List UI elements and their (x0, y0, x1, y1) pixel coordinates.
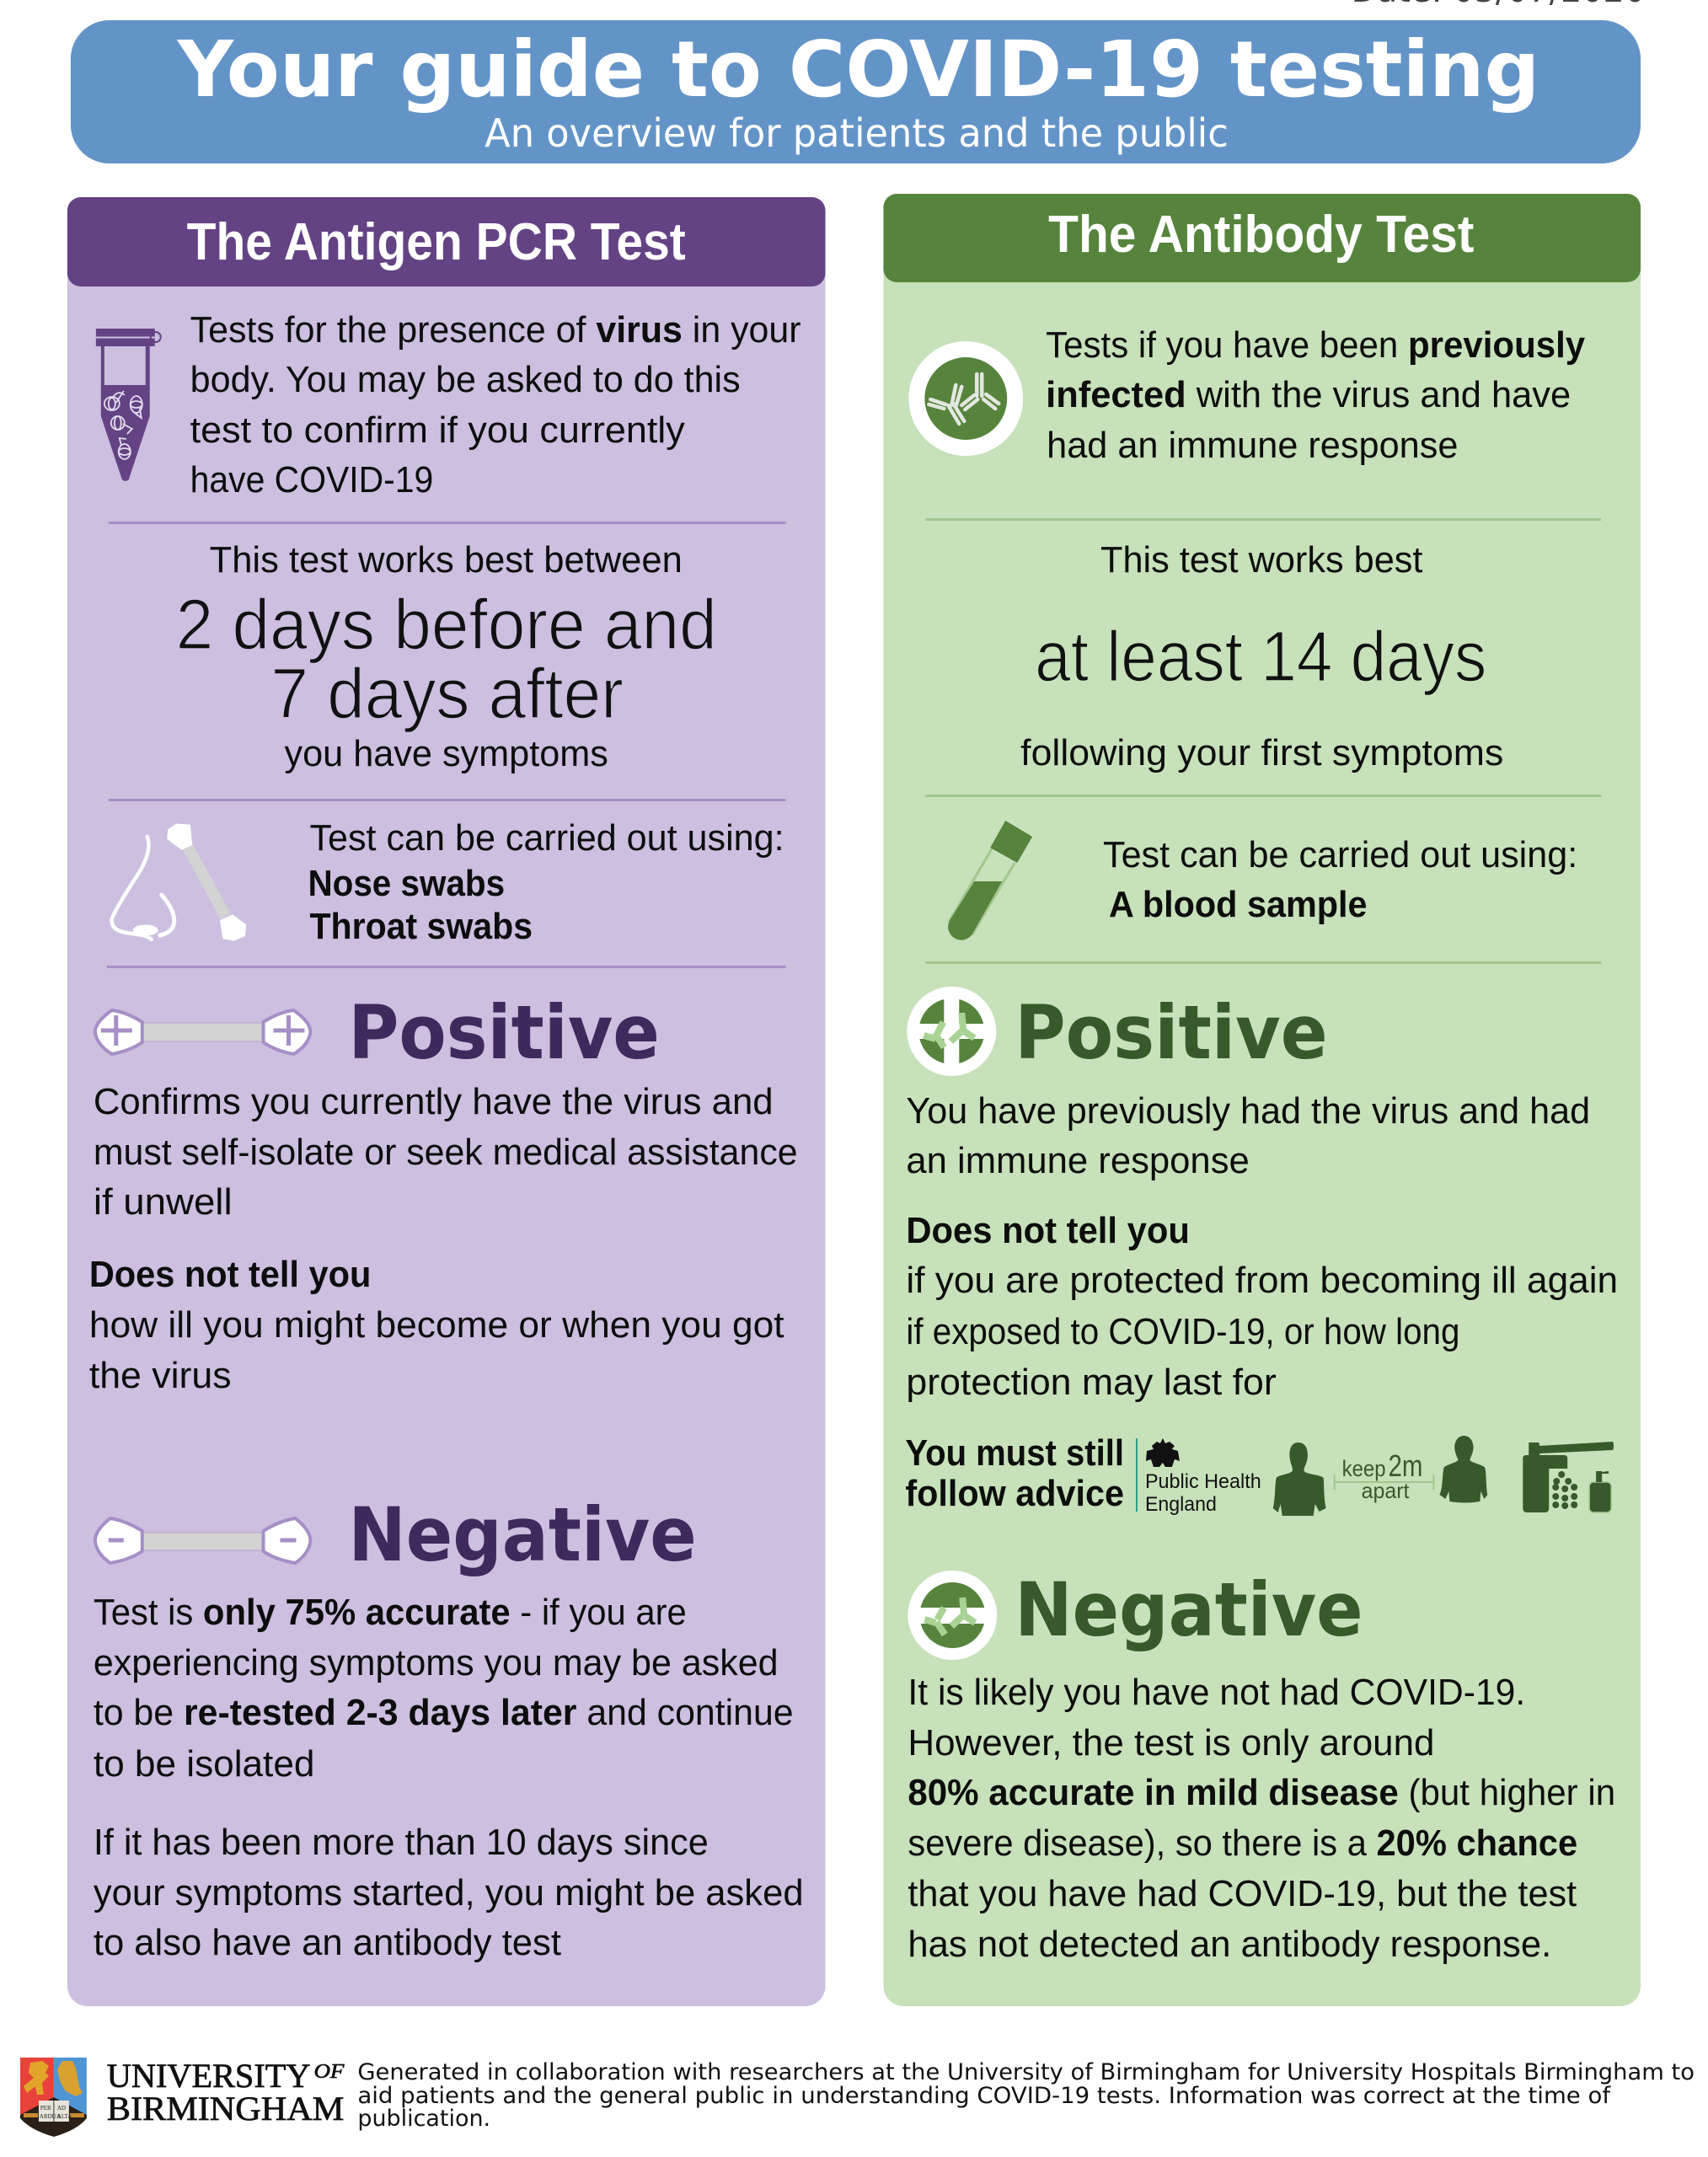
logo: Public Health England: Public Health (1145, 1470, 1261, 1493)
text block: antibody negative meaning: has not detected an antibody response. (908, 1924, 1551, 1965)
text block: antigen negative meaning: to be re-tested 2-3 days later and continue (94, 1692, 794, 1733)
text block: what the antigen test does: Tests for the presence of virus in your (190, 309, 801, 351)
text block: antibody positive meaning: Does not tell you (906, 1210, 1190, 1251)
text block: antibody positive meaning (906, 1090, 1618, 1403)
icon: antibody negative (908, 1571, 997, 1660)
text block: antigen sampling: Throat swabs (309, 906, 533, 947)
text block: antigen negative meaning: Test is only 75% accurate - if you are (94, 1592, 687, 1633)
text block: antibody positive meaning: if you are protected from becoming ill again (906, 1260, 1618, 1301)
text block: antigen sampling: Test can be carried out using: (309, 817, 784, 859)
text block: antigen positive meaning: must self-isolate or seek medical assistance (94, 1132, 798, 1173)
text block: antibody negative meaning: that you have had COVID-19, but the test (908, 1873, 1577, 1914)
panel: antigen PCR test (67, 197, 826, 2006)
text block: must still follow advice: follow advice (905, 1473, 1124, 1514)
text block: antigen test timing (176, 539, 717, 774)
footer note: publication. (357, 2106, 490, 2132)
title banner (71, 20, 1641, 163)
icon: keep 2m apart (1273, 1436, 1487, 1516)
panel: antibody test (883, 194, 1641, 2006)
text block: antigen positive meaning (89, 1081, 798, 1396)
icon: negative swab (95, 1518, 310, 1563)
icon: keep 2m apart: apart (1362, 1478, 1410, 1503)
text block: what the antigen test does: have COVID-19 (190, 459, 433, 500)
panel header: antibody test: The Antibody Test (1048, 206, 1474, 264)
text block: antigen sampling: Nose swabs (308, 863, 505, 904)
logo: Public Health England (1136, 1438, 1261, 1516)
icon: antibody positive (907, 987, 996, 1076)
text block: antigen test timing: you have symptoms (284, 733, 608, 774)
text block: what the antigen test does: test to confirm if you currently (190, 409, 685, 451)
footer note: Generated in collaboration with researchers at the University of Birmingham for University Hospitals Birmingham to (357, 2059, 1695, 2085)
text block: antibody positive meaning: an immune response (906, 1140, 1250, 1181)
wordmark: University of Birmingham: UNIVERSITY (107, 2057, 310, 2095)
text block: must still follow advice: You must still (905, 1432, 1124, 1474)
text block: what the antigen test does (190, 309, 801, 500)
text block: antigen negative meaning: If it has been more than 10 days since (94, 1822, 709, 1863)
icon: PCR sample tube (96, 329, 161, 481)
text block: antibody sampling (1103, 834, 1577, 925)
wordmark: University of Birmingham (107, 2057, 345, 2128)
text block: what the antigen test does: body. You may be asked to do this (190, 359, 741, 400)
text block: antibody sampling: Test can be carried out using: (1103, 834, 1577, 875)
footer note (357, 2059, 1695, 2132)
heading: positive: Positive (1015, 989, 1328, 1076)
text block: antigen positive meaning: if unwell (94, 1181, 233, 1223)
text block: antigen test timing: This test works best between (210, 539, 683, 581)
text block: antibody negative meaning: 80% accurate in mild disease (but higher in (908, 1772, 1615, 1813)
text block: antigen test timing: 2 days before and (176, 585, 717, 664)
heading: negative: Negative (348, 1491, 697, 1578)
subtitle: An overview for patients and the public (485, 110, 1229, 156)
text block: must still follow advice (905, 1432, 1124, 1514)
text block: antibody negative meaning: However, the test is only around (908, 1722, 1434, 1764)
text block: antigen negative meaning: experiencing symptoms you may be asked (94, 1642, 779, 1683)
icon: nose and swab (112, 825, 245, 939)
text block: what the antibody test does: had an immune response (1047, 425, 1458, 466)
text block: antigen positive meaning: Does not tell you (89, 1254, 371, 1295)
wordmark: University of Birmingham: OF (313, 2061, 345, 2083)
text block: antigen positive meaning: the virus (89, 1355, 232, 1396)
text block: antigen positive meaning: how ill you might become or when you got (89, 1304, 784, 1346)
logo: University of Birmingham crest (20, 2058, 87, 2137)
icon: blood sample tube (948, 821, 1032, 940)
text block: what the antibody test does: Tests if you have been previously (1046, 324, 1586, 366)
text block: antigen sampling (308, 817, 784, 947)
logo: University of Birmingham crest: ALTA (57, 2113, 72, 2120)
panel header: antibody test (883, 194, 1641, 282)
icon: antibodies in circle (908, 341, 1023, 456)
icon: keep 2m apart: keep (1342, 1456, 1386, 1481)
text block: antibody test timing: This test works best (1100, 539, 1422, 581)
icon: hand washing tap and soap (1523, 1442, 1614, 1512)
panel header: antigen PCR test (67, 197, 826, 286)
text block: antibody test timing (1020, 539, 1503, 773)
icon: positive swab (95, 1010, 310, 1054)
title: Your guide to COVID-19 testing (177, 24, 1539, 115)
text block: antibody positive meaning: protection may last for (906, 1362, 1277, 1403)
heading: negative: Negative (1015, 1566, 1363, 1653)
text block: antigen negative meaning: your symptoms started, you might be asked (94, 1872, 804, 1913)
text block: antigen negative meaning: to be isolated (94, 1743, 314, 1785)
text block: antibody negative meaning: severe disease), so there is a 20% chance (908, 1822, 1577, 1864)
text block: antibody test timing: following your first symptoms (1020, 732, 1503, 773)
text block: antibody positive meaning: if exposed to COVID-19, or how long (906, 1311, 1459, 1352)
heading: positive: Positive (348, 989, 660, 1076)
logo: University of Birmingham crest: AD (57, 2105, 66, 2112)
text block: antigen negative meaning: to also have an antibody test (94, 1922, 561, 1963)
text block: antibody sampling: A blood sample (1109, 884, 1368, 925)
logo: University of Birmingham crest: PER (40, 2105, 51, 2112)
text block: what the antibody test does: infected with the virus and have (1046, 374, 1571, 415)
panel header: antigen PCR test: The Antigen PCR Test (187, 213, 686, 271)
logo: Public Health England: England (1145, 1493, 1217, 1516)
wordmark: University of Birmingham: BIRMINGHAM (107, 2090, 344, 2128)
text block: antibody negative meaning (908, 1672, 1615, 1965)
text block: antibody test timing: at least 14 days (1035, 617, 1486, 696)
text block: antigen positive meaning: Confirms you currently have the virus and (94, 1081, 774, 1122)
footer note: aid patients and the general public in understanding COVID-19 tests. Information was correct at the time of (357, 2083, 1612, 2109)
text block: antibody positive meaning: You have previously had the virus and had (906, 1090, 1590, 1132)
text block: antigen negative meaning (94, 1592, 804, 1963)
text block: what the antibody test does (1046, 324, 1586, 466)
text block: antibody negative meaning: It is likely you have not had COVID-19. (908, 1672, 1525, 1713)
icon: keep 2m apart: 2m (1389, 1448, 1422, 1483)
text block: antigen test timing: 7 days after (271, 654, 624, 733)
logo: University of Birmingham crest: ARDUA (40, 2113, 61, 2120)
